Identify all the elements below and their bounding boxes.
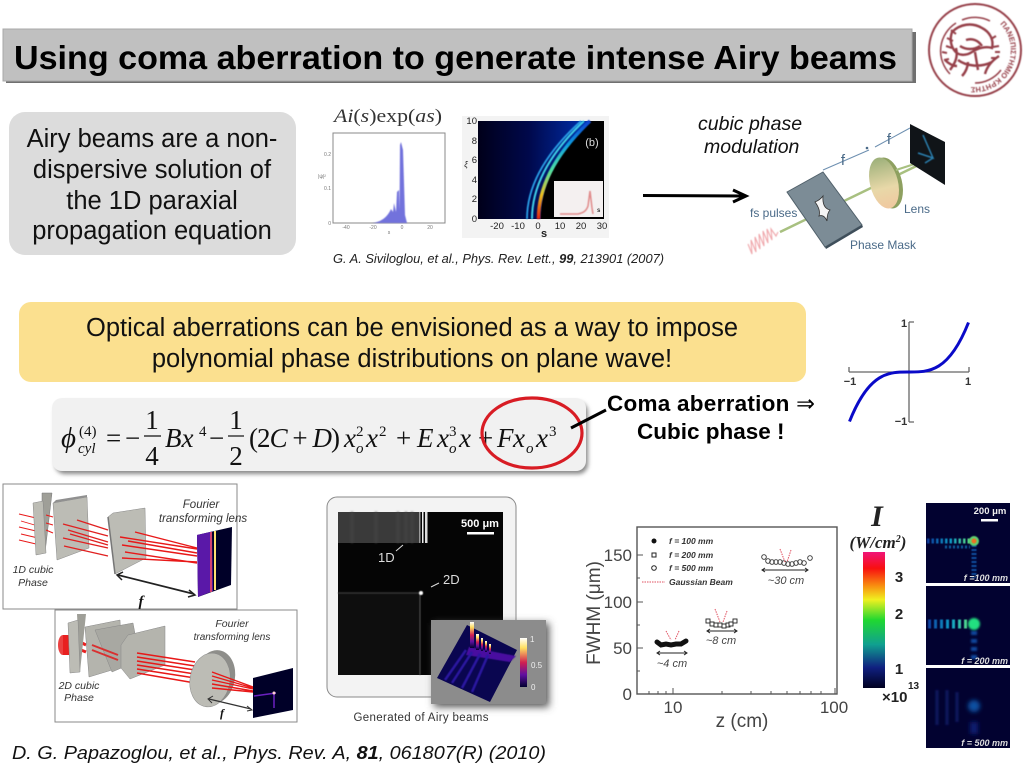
panel: phase equation: x (436, 423, 449, 453)
panel: phase equation: 3 (449, 424, 456, 440)
arrow: to phase mask diagram (643, 190, 746, 202)
panel: Airy beam definition (9, 112, 296, 255)
diagram: 2D cubic phase setup: f (220, 706, 225, 720)
panel: phase equation: Bx (165, 423, 193, 453)
chart: Airy beam propagation heat map: -10 (511, 221, 525, 232)
chart: Airy beam propagation heat map: 10 (555, 221, 565, 232)
legend: intensity colour bar: ×10 (882, 689, 907, 706)
chart: Airy beam propagation heat map: (b) (585, 137, 599, 149)
legend: intensity colour bar: 2 (895, 606, 903, 623)
chart: Airy intensity profile (318, 133, 445, 236)
panel: phase equation: x (343, 423, 356, 453)
icon: university seal logo: ΠΑΝΕΠΙΣΤΗΜΙΟ ΚΡΗΤΗΣ (970, 20, 1017, 94)
chart: cubic function curve: 1 (901, 318, 907, 330)
diagram: phase mask and lens setup: Phase Mask (850, 238, 917, 252)
panel: phase equation: 1 (229, 405, 243, 435)
chart: Airy intensity profile: -40 (342, 225, 350, 231)
legend: intensity colour bar: 1 (895, 661, 903, 678)
chart: cubic function curve: −1 (844, 376, 856, 388)
panel: generated Airy beams image: 500 μm (461, 518, 499, 530)
panel: phase equation: 2 (379, 424, 386, 440)
panel: phase equation: cyl (78, 441, 95, 457)
panel: Airy beam definition: Airy beams are a non- (27, 125, 277, 153)
legend: f = 500 mm (669, 563, 714, 573)
chart: Airy intensity profile: 0.1 (324, 186, 331, 192)
chart: FWHM vs z: 100 (820, 698, 848, 717)
chart: Airy beam propagation heat map (462, 116, 609, 240)
panel: phase equation: + (478, 423, 493, 453)
chart: Airy beam propagation heat map: s (541, 228, 547, 240)
image: focus f = 200 mm: f = 200 mm (961, 656, 1008, 666)
chart: FWHM vs z: FWHM (μm) (584, 561, 605, 665)
panel: optical aberrations statement: polynomial phase distributions on plane wave! (152, 345, 672, 373)
panel: phase equation: 2 (229, 441, 243, 471)
label: cubic phase modulation (698, 113, 802, 158)
chart: Airy intensity profile: |ψ|² (318, 174, 326, 180)
panel: phase equation: 3 (549, 424, 556, 440)
panel: phase equation: x (365, 423, 378, 453)
legend: f = 100 mm (669, 536, 714, 546)
diagram: 1D cubic phase setup: f (138, 594, 146, 610)
legend: intensity colour bar: I (870, 500, 884, 533)
panel: phase equation (52, 398, 588, 474)
diagram: 2D cubic phase setup: Phase (64, 692, 94, 704)
chart: cubic function curve: −1 (895, 416, 907, 428)
chart: FWHM vs z: 50 (613, 639, 632, 658)
diagram: 1D cubic phase setup: 1D cubic (13, 564, 54, 576)
diagram: 1D cubic phase setup (3, 484, 247, 610)
diagram: 1D cubic phase setup: transforming lens (159, 513, 247, 525)
legend: intensity colour bar (850, 500, 920, 706)
chart: Airy beam propagation heat map: s (597, 208, 601, 214)
chart: FWHM vs z (584, 527, 848, 732)
callout line: to coma text (571, 410, 606, 428)
chart: FWHM vs z: 150 (604, 546, 632, 565)
series: f = 500 mm: ~30 cm (768, 575, 804, 587)
image: focus f = 100 mm: 200 μm (974, 506, 1006, 517)
panel: phase equation: 2 (356, 424, 364, 440)
diagram: 1D cubic phase setup: Fourier (183, 499, 220, 511)
chart: Airy intensity profile: -20 (369, 225, 377, 231)
series: f = 100 mm: ~4 cm (657, 658, 687, 670)
image: focus f = 500 mm: f = 500 mm (961, 738, 1008, 748)
diagram: phase mask and lens setup: fs pulses (750, 206, 797, 220)
panel: Airy beam definition: propagation equation (32, 217, 272, 245)
panel: phase equation: 1 (145, 405, 159, 435)
diagram: 2D cubic phase setup: 2D cubic (58, 680, 100, 692)
panel: phase equation: ϕ (61, 422, 76, 454)
series: f = 200 mm (706, 609, 737, 647)
chart: Airy beam propagation heat map: 0 (472, 214, 477, 225)
panel: phase equation: 4 (199, 424, 207, 440)
panel: optical aberrations statement: Optical aberrations can be envisioned as a way to impose (86, 314, 738, 342)
legend: f = 200 mm (669, 550, 714, 560)
legend: intensity colour bar: 3 (895, 569, 903, 586)
citation: Papazoglou: D. G. Papazoglou, et al., Phys. Rev. A, 81, 061807(R) (2010) (12, 743, 546, 763)
chart: FWHM vs z: 0 (623, 685, 632, 704)
chart: Airy beam propagation heat map: -20 (490, 221, 504, 232)
panel: optical aberrations statement (19, 302, 806, 382)
chart: cubic function curve: 1 (965, 376, 971, 388)
title bar (3, 29, 916, 83)
inset: 3D beam surface plot (431, 620, 549, 707)
diagram: phase mask and lens setup: Lens (904, 202, 930, 216)
icon: university seal logo (927, 2, 1023, 98)
panel: phase equation: (2C + D) (249, 423, 340, 453)
inset: 3D beam surface plot: 1 (530, 635, 535, 644)
diagram: 1D cubic phase setup: Phase (18, 577, 48, 589)
chart: Airy beam propagation heat map: ξ (464, 160, 468, 169)
chart: Airy beam propagation heat map: 2 (472, 194, 477, 205)
legend: intensity colour bar: ) (899, 533, 906, 552)
panel: phase equation: x (512, 423, 525, 453)
caption: generated of Airy beams: Generated of Airy beams (354, 712, 489, 724)
panel: generated Airy beams image: 2D (443, 572, 460, 587)
chart: Airy beam propagation heat map: 10 (466, 116, 477, 127)
panel: generated Airy beams image: 1D (378, 550, 395, 565)
diagram: 2D cubic phase setup (55, 610, 297, 722)
chart: Airy intensity profile: s (388, 230, 391, 236)
legend: intensity colour bar: 2 (895, 534, 901, 545)
diagram: 2D cubic phase setup: Fourier (215, 618, 249, 630)
chart: cubic function curve (844, 318, 971, 428)
panel: phase equation: x (535, 423, 548, 453)
chart: Airy beam propagation heat map: 4 (472, 175, 477, 186)
panel: phase equation: E (416, 423, 434, 453)
legend (642, 536, 733, 587)
panel: phase equation: o (526, 441, 534, 457)
panel: phase equation: 4 (145, 441, 159, 471)
chart: Airy intensity profile: 20 (427, 225, 433, 231)
chart: FWHM vs z: z (cm) (716, 711, 768, 732)
chart: Airy beam propagation heat map: 8 (472, 136, 477, 147)
panel: phase equation: = (106, 423, 121, 453)
citation: Siviloglou: G. A. Siviloglou, et al., Phys. Rev. Lett., 99, 213901 (2007) (333, 251, 664, 266)
chart: Airy beam propagation heat map: 0 (535, 221, 541, 232)
series: f = 500 mm (762, 549, 812, 587)
panel: Airy beam definition: dispersive solution of (33, 156, 272, 184)
series: f = 100 mm (657, 631, 687, 670)
inset: 3D beam surface plot: 0 (531, 683, 536, 692)
label: cubic phase modulation: modulation (704, 136, 799, 158)
diagram: phase mask and lens setup (748, 124, 945, 254)
callout: red ellipse around coma term (482, 398, 582, 468)
image: focus f = 200 mm (926, 586, 1010, 666)
diagram: phase mask and lens setup: f (887, 131, 892, 148)
text: coma aberration implies cubic phase (607, 391, 815, 444)
legend: intensity colour bar: (W/cm (850, 533, 896, 552)
chart: Airy intensity profile: 0 (328, 221, 331, 227)
diagram: 2D cubic phase setup: transforming lens (194, 632, 270, 643)
label: cubic phase modulation: cubic phase (698, 113, 802, 135)
inset: 3D beam surface plot: 0.5 (531, 661, 543, 670)
text: coma aberration implies cubic phase: Coma aberration ⇒ (607, 391, 815, 417)
panel: phase equation: o (356, 441, 364, 457)
chart: Airy intensity profile: 0 (401, 225, 404, 231)
legend: Gaussian Beam (669, 577, 733, 587)
diagram: phase mask and lens setup: f (841, 152, 846, 169)
image: focus f = 500 mm (926, 668, 1010, 748)
formula: Ai(s)exp(as): Ai(s)exp( as) (332, 106, 442, 127)
title: Using coma aberration to generate intense Airy beams (14, 39, 897, 76)
chart: Airy beam propagation heat map: 20 (576, 221, 586, 232)
panel: phase equation: o (449, 441, 457, 457)
chart: Airy beam propagation heat map: 6 (472, 155, 477, 166)
panel: phase equation: + (396, 423, 411, 453)
chart: Airy intensity profile: 0.2 (324, 152, 331, 158)
legend: intensity colour bar: 13 (908, 681, 920, 692)
panel: phase equation: − (125, 423, 140, 453)
series: f = 200 mm: ~8 cm (706, 635, 736, 647)
chart: FWHM vs z: 100 (604, 593, 632, 612)
image: focus f = 100 mm: f =100 mm (964, 573, 1008, 583)
panel: phase equation: F (496, 423, 514, 453)
panel: phase equation: − (209, 423, 224, 453)
chart: FWHM vs z: 10 (664, 698, 682, 717)
chart: Airy beam propagation heat map: 30 (597, 221, 607, 232)
panel: phase equation: (4) (79, 424, 96, 440)
panel: Airy beam definition: the 1D paraxial (66, 187, 238, 215)
panel: generated Airy beams image (327, 497, 549, 707)
image: focus f = 100 mm (926, 503, 1010, 583)
text: coma aberration implies cubic phase: Cubic phase ! (637, 419, 785, 444)
panel: phase equation: x (458, 423, 471, 453)
